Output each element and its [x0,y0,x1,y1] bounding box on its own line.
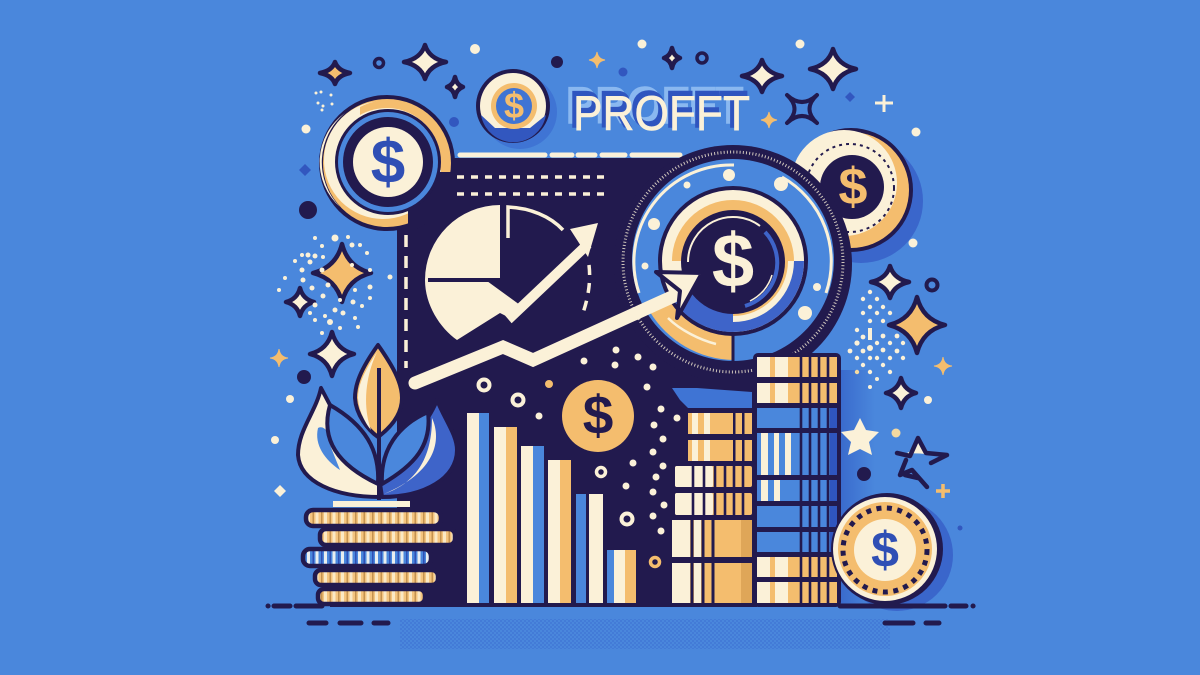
small arrow over pie [506,223,598,316]
ground lines [268,606,973,623]
left coin stack [303,510,455,604]
middle coin stack [672,413,752,603]
small plus sparkles [270,52,952,498]
sparkle: right one [871,266,909,298]
small top coin [476,69,557,149]
dollar sign: bottom right coin: $ [871,522,899,578]
title: PROFFT: PROFFT [566,79,743,133]
sparkle: top cream [404,45,446,79]
cream star [841,418,879,455]
big blue coin ring [614,145,852,383]
dollar sign: small top coin: $ [504,85,524,126]
scattered dots and rings [271,40,962,530]
dollar sign: top left coin: $ [371,128,405,197]
sparkle: left small [286,288,314,316]
panel dashed text lines [457,177,610,194]
sparkle: top right one [742,60,782,92]
pie chart [425,205,590,340]
dollar sign: right coin: $ [839,158,868,216]
sparkle: left large gold [313,244,371,302]
panel left dashed edge [404,235,408,368]
sparkle: small diamond [447,77,463,97]
big growth arrow [415,272,702,383]
sparkle: left lower [310,332,354,376]
bar chart [467,413,636,603]
blue gap behind stacks [672,388,752,408]
sparkle: right large gold [889,297,945,353]
sparkle: top left gold [320,62,350,84]
dollar sign: center coin: $ [712,219,754,304]
sparkle: top small diamond [664,48,680,68]
dollar sign: medallion: $ [583,384,613,446]
shadow beside stacks [841,370,875,605]
sparkle: right lower [886,378,916,408]
tall coin stack [753,353,841,607]
gold dollar medallion [562,380,634,452]
sparkle: top right two [810,49,856,89]
halftone ground shadow [400,619,890,649]
broken outline star [897,438,947,487]
dark navy chart panel [330,158,757,607]
panel dots [478,346,680,566]
left dot cluster [277,90,392,335]
plant: sprout leaves [298,345,457,507]
title: PROFFT: PROFFT [570,83,747,137]
sparkle: outlined cross star [787,95,817,123]
right dot cluster [848,290,905,389]
panel top dashes [460,152,680,158]
bottom right gold coin [831,493,953,611]
top left coin [319,95,457,232]
title: PROFFT: PROFFT [573,87,750,141]
right gold coin [789,128,923,263]
